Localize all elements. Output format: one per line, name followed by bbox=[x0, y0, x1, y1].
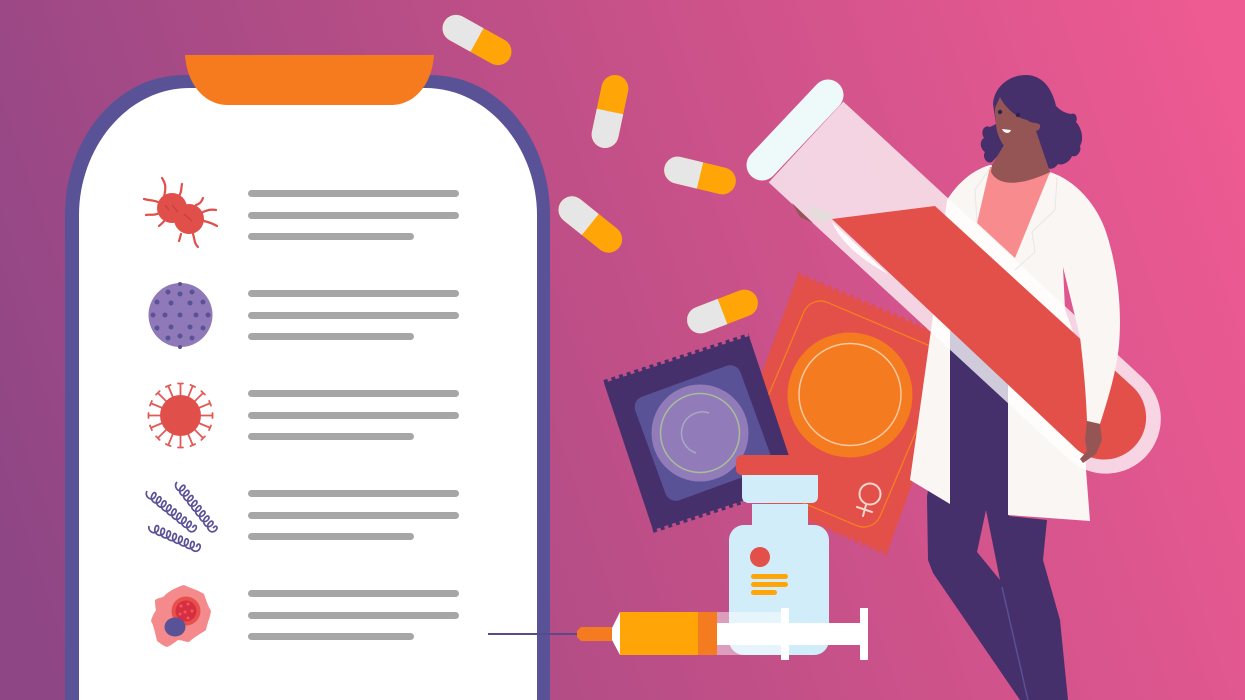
vial label bbox=[750, 547, 788, 595]
syringe hub bbox=[577, 627, 612, 641]
text lines: row 5 bbox=[248, 590, 459, 640]
face bbox=[995, 97, 1040, 148]
clipboard sheet bbox=[79, 88, 537, 700]
text lines: row 3 bbox=[248, 390, 459, 440]
icon: red female condom packet bbox=[722, 274, 962, 554]
coat lapel lines bbox=[975, 168, 1057, 270]
hair bbox=[981, 75, 1082, 169]
text lines: row 2 bbox=[248, 290, 459, 340]
icon: capsule 2 bbox=[589, 73, 631, 150]
neck bbox=[991, 128, 1050, 183]
trousers bbox=[927, 325, 1068, 700]
left hand bbox=[792, 203, 813, 223]
test tube glass bbox=[769, 102, 1184, 496]
coat right sleeve bbox=[1050, 172, 1120, 424]
icon: purple virus ball bbox=[148, 282, 212, 349]
eyes and smile bbox=[998, 110, 1020, 133]
icon: capsule 5 bbox=[683, 286, 762, 337]
clipboard frame bbox=[65, 75, 550, 700]
icon: capsule 1 bbox=[438, 10, 516, 70]
icon: capsule 4 bbox=[553, 191, 628, 258]
icon: vial bbox=[729, 455, 829, 655]
vial body bbox=[729, 525, 829, 655]
plunger bbox=[717, 623, 862, 645]
barrel flange bbox=[781, 608, 789, 660]
figure: woman in lab coat holding test tube bbox=[762, 75, 1184, 700]
empty barrel bbox=[717, 612, 781, 655]
icon: syringe bbox=[488, 608, 868, 660]
vial shoulder bbox=[742, 475, 818, 503]
right hand bbox=[1080, 421, 1102, 463]
icon: mite bbox=[144, 178, 217, 247]
barrel fill bbox=[620, 612, 698, 655]
vial neck bbox=[752, 504, 808, 525]
panel: clipboard bbox=[65, 55, 550, 700]
icon: infected cell bbox=[151, 585, 211, 647]
barrel shoulder bbox=[612, 612, 620, 655]
text lines: row 4 bbox=[248, 490, 459, 540]
icon: capsule 3 bbox=[661, 154, 739, 197]
icon: spirochete bacteria bbox=[144, 480, 218, 553]
shirt bbox=[977, 167, 1050, 258]
icon: purple condom packet bbox=[604, 335, 798, 531]
needle bbox=[488, 633, 577, 635]
test tube lip bbox=[762, 95, 828, 165]
lab coat bbox=[910, 165, 1090, 521]
left fingers through glass bbox=[807, 205, 837, 222]
liquid highlight bbox=[832, 222, 888, 274]
vial cap bbox=[736, 455, 820, 475]
clipboard clip bbox=[185, 55, 434, 105]
icon: coronavirus bbox=[148, 384, 212, 448]
plunger end bbox=[860, 608, 868, 660]
text lines: row 1 bbox=[248, 190, 459, 240]
trouser seam bbox=[1002, 587, 1028, 700]
barrel seal bbox=[698, 612, 717, 655]
blood liquid bbox=[832, 206, 1146, 460]
